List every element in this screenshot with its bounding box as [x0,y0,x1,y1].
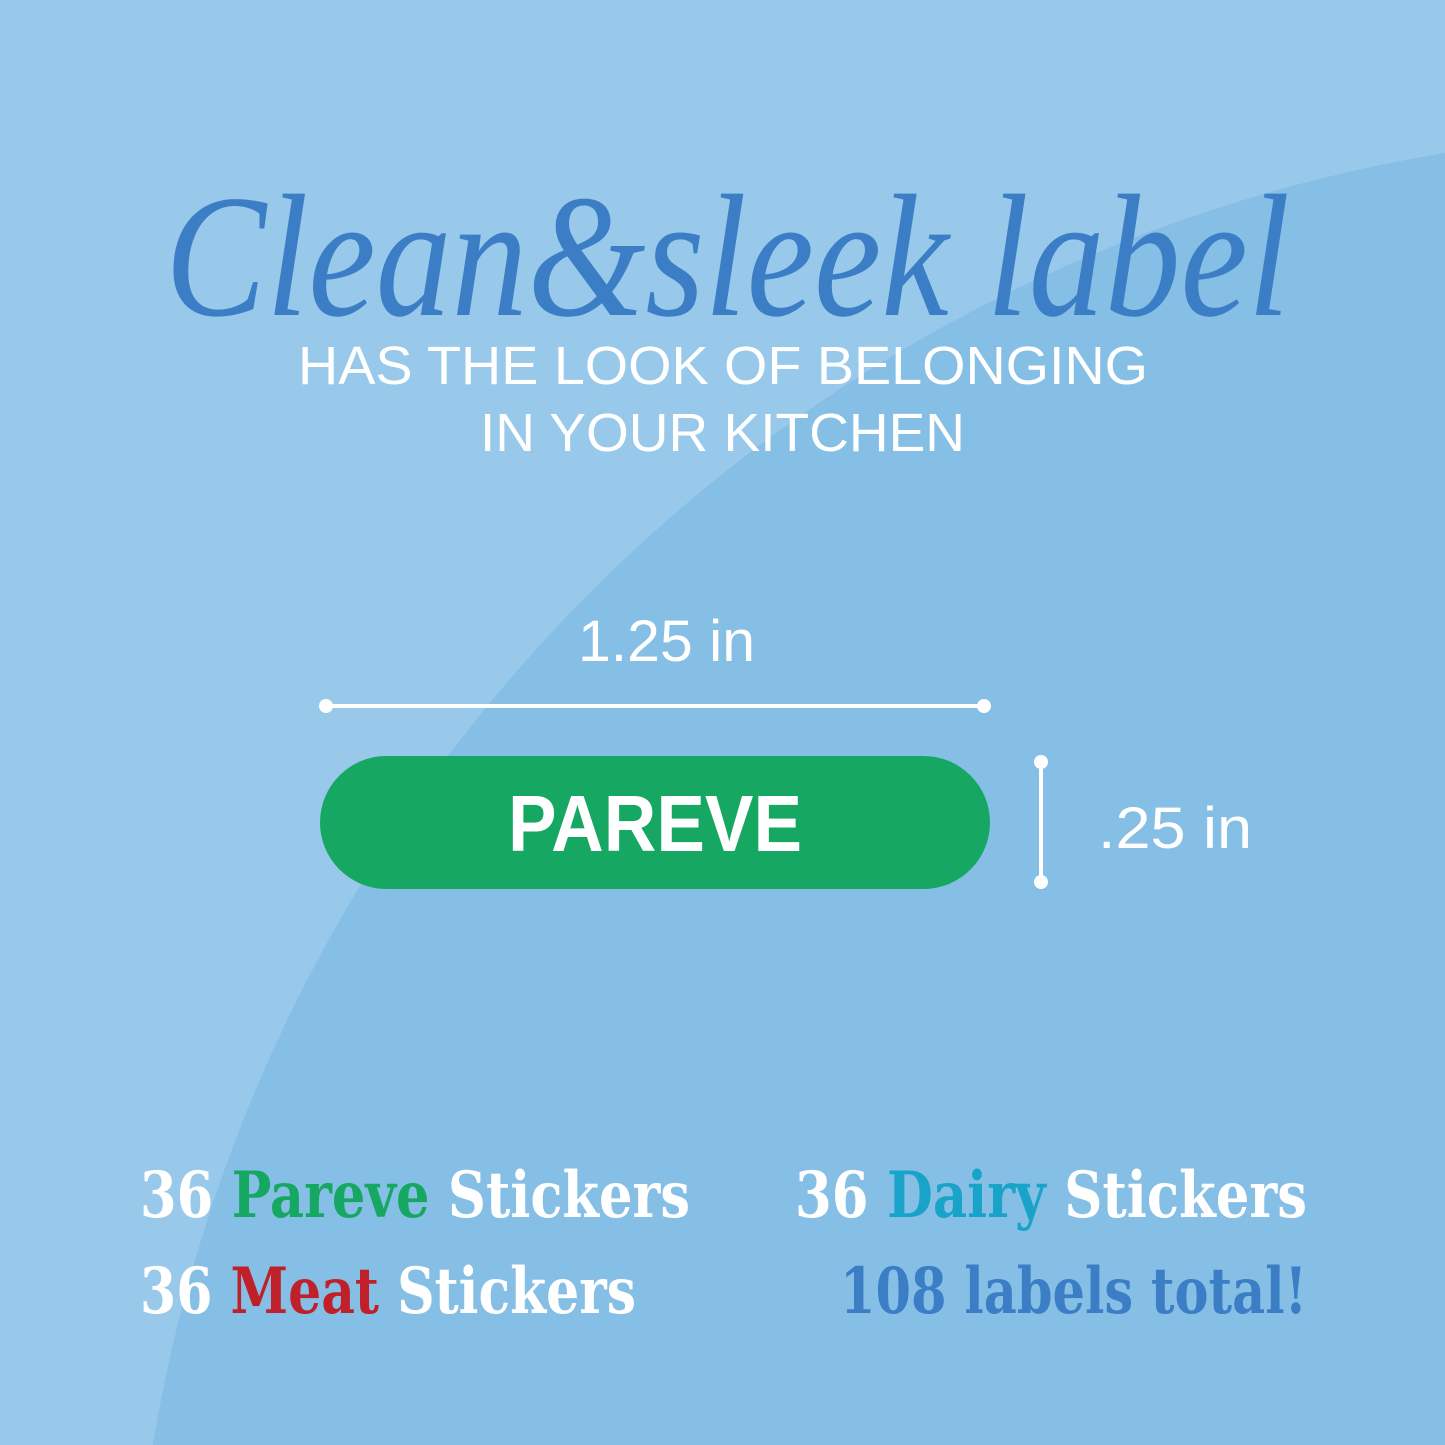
sticker counts: 36 Pareve Stickers [140,1158,690,1233]
label pill: PAREVE [320,756,990,889]
sticker counts [140,1158,1307,1329]
sticker counts: 36 Meat Stickers [140,1254,636,1329]
height dimension [1034,755,1252,889]
width dimension: 1.25 in [578,609,755,674]
sticker counts: 36 Dairy Stickers [795,1158,1307,1233]
sticker counts: 108 labels total! [840,1254,1307,1329]
label pill: PAREVE: PAREVE [508,779,802,868]
height dimension: .25 in [1098,796,1252,861]
width dimension [319,609,991,713]
background arc [153,153,1445,1445]
subtitle: HAS THE LOOK OF BELONGING [298,336,1148,396]
subtitle: IN YOUR KITCHEN [480,403,965,463]
subtitle [298,336,1148,463]
title: script: Clean&sleek label [165,159,1290,353]
